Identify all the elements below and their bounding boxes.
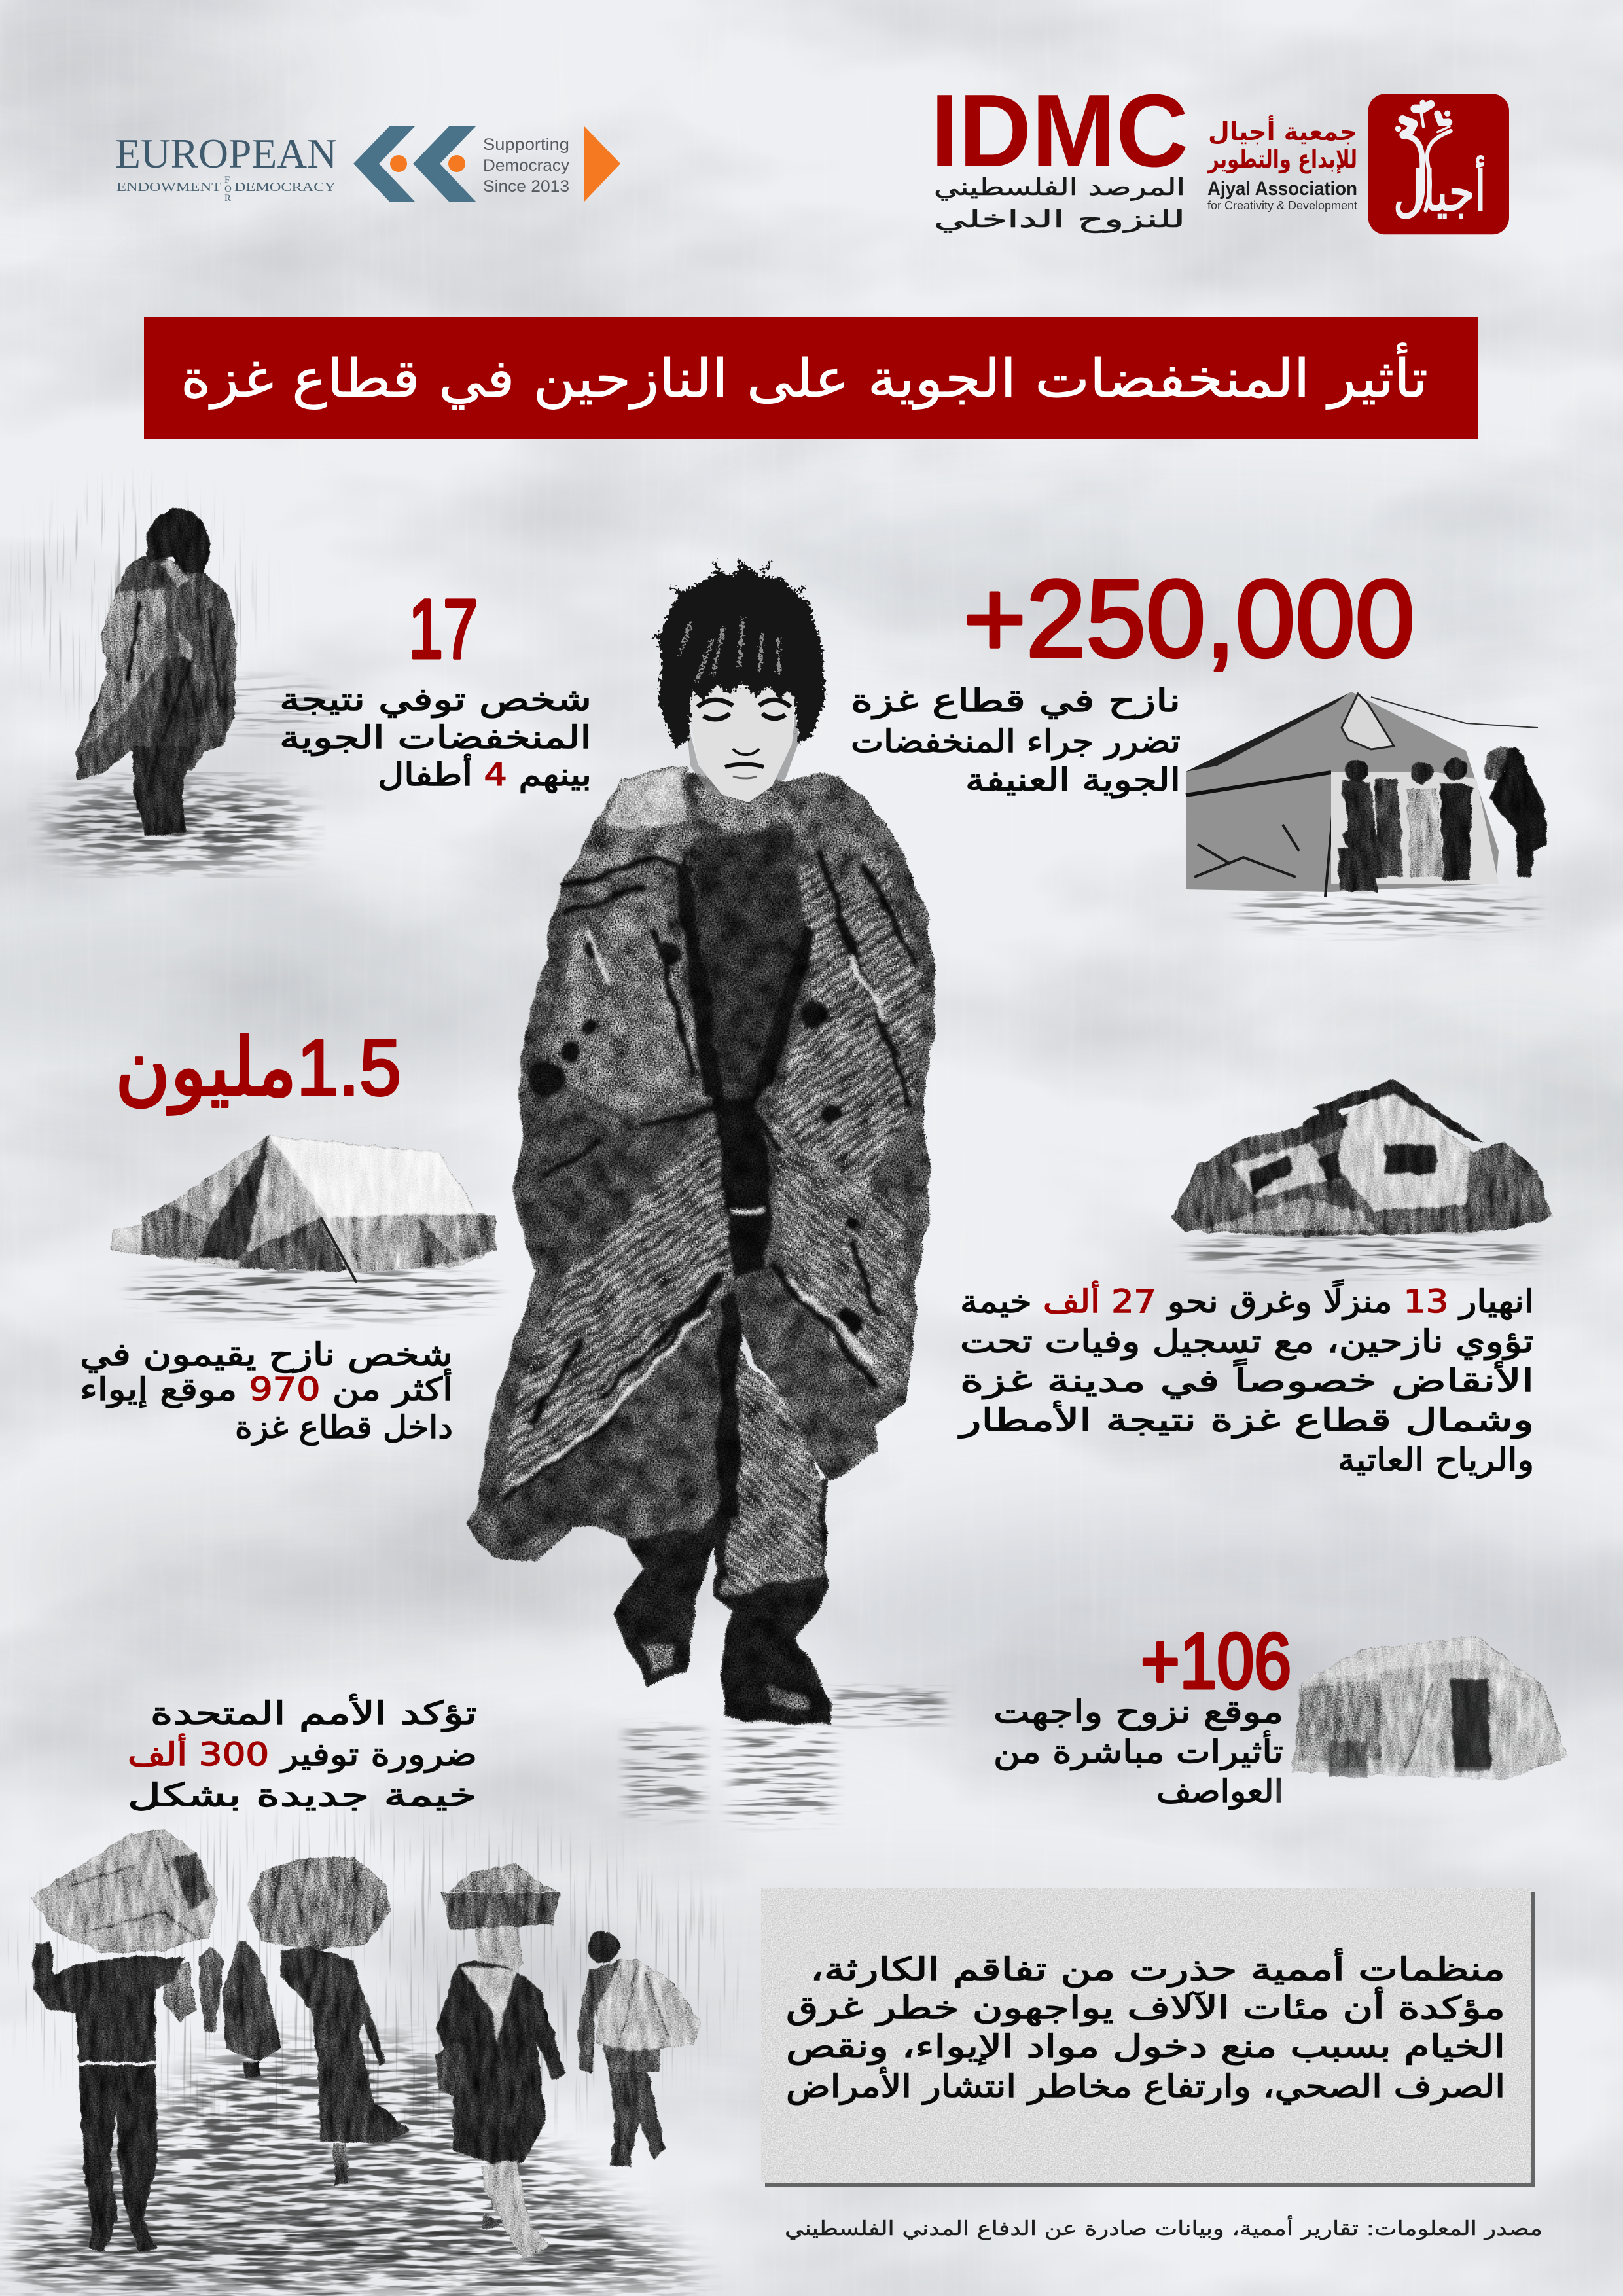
stat: 17 deaths: 17 [408,583,478,676]
illustration: collapsed house [1171,1079,1552,1272]
stat: 106 displacement sites: العواصف [1156,1773,1283,1810]
text: house collapse and tents flooded: الأنقاض خصوصاً في مدينة غزة [960,1358,1534,1399]
text: UN call for 300 thousand tents: تؤكد الأمم المتحدة [151,1693,477,1732]
reflection in water [628,1689,942,1820]
text: house collapse and tents flooded: تؤوي نازحين، مع تسجيل وفيات تحت [960,1323,1534,1360]
text: people in shelter sites [80,1336,453,1446]
logo: European Endowment for Democracy [115,130,337,204]
stat: 17 deaths: شخص توفي نتيجة [279,681,592,718]
stat: 250,000 displaced: نازح في قطاع غزة [851,683,1181,719]
logo: Ajyal emblem [1368,94,1509,234]
logo: European Endowment for Democracy: R [224,193,231,204]
text: UN call for 300 thousand tents: خيمة جديدة بشكل [128,1777,477,1814]
title banner [144,317,1478,439]
logo: Supporting Democracy chevrons: Democracy [483,156,570,175]
stat: 1.5 million: 1.5مليون [115,1023,401,1115]
panel: warning from UN organisations: مؤكدة أن مئات الآلاف يواجهون خطر غرق [786,1987,1505,2026]
text: UN call for 300 thousand tents [128,1693,477,1814]
logo: IDMC: للنزوح الداخلي [934,206,1185,233]
logo: Supporting Democracy chevrons: Supporting [483,135,569,154]
text: house collapse and tents flooded: وشمال قطاع غزة نتيجة الأمطار [958,1400,1534,1439]
logo: Supporting Democracy chevrons [353,126,620,202]
woman with round bundle [247,1856,391,1950]
boy's face details [698,700,791,778]
title banner: تأثير المنخفضات الجوية على النازحين في قطاع غزة [181,343,1428,410]
stat: 250,000 displaced [851,557,1415,798]
illustration: child walking in rain [26,497,334,865]
logo: Ajyal Association wordmark: for Creativity & Development [1207,199,1357,212]
logo: European Endowment for Democracy: F [224,175,230,185]
text: house collapse and tents flooded [958,1279,1534,1479]
stat: 17 deaths [279,583,592,793]
logo: Ajyal Association wordmark: Ajyal Association [1207,178,1357,200]
source note: مصدر المعلومات: تقارير أممية، وبيانات صادرة عن الدفاع المدني الفلسطيني [785,2215,1543,2240]
text: people in shelter sites: شخص نازح يقيمون في [80,1336,453,1373]
illustration: central boy in coat [467,560,942,1820]
logo: European Endowment for Democracy: DEMOCRACY [234,180,336,194]
distant figures [164,1964,196,2022]
woman with basket [441,1892,561,1930]
text: house collapse and tents flooded: انهيار 13 منزلًا وغرق نحو 27 ألف خيمة [960,1279,1534,1320]
logo: Ajyal Association wordmark [1207,115,1357,212]
stat: 250,000 displaced: تضرر جراء المنخفضات [851,723,1181,760]
logo: Ajyal Association wordmark: جمعية أجيال [1208,115,1357,146]
logo: European Endowment for Democracy: EUROPEAN [115,130,337,177]
man with back sack [588,1931,619,1963]
stat: 250,000 displaced: الجوية العنيفة [965,762,1181,798]
illustration: family in tent [1186,692,1548,931]
panel: warning from UN organisations: الصرف الصحي، وارتفاع مخاطر انتشار الأمراض [786,2066,1505,2105]
panel: warning from UN organisations: الخيام بسبب منع دخول مواد الإيواء، ونقص [786,2028,1505,2065]
illustration: displaced people walking in rain [0,1826,733,2296]
stat: 106 displacement sites: تأثيرات مباشرة من [993,1730,1283,1770]
panel: warning from UN organisations: منظمات أممية حذرت من تفاقم الكارثة، [810,1948,1505,1988]
logo: European Endowment for Democracy: O [224,184,232,194]
stat: 17 deaths: بينهم 4 أطفال [378,754,592,793]
logo: Ajyal emblem: أجيال [1393,156,1486,224]
illustration: flooded tent [111,1136,497,1318]
text: people in shelter sites: داخل قطاع غزة [235,1409,453,1446]
stat: 106 displacement sites [993,1617,1291,1810]
stat: 250,000 displaced: +250,000 [963,557,1415,680]
illustration: weathered tent [1276,1636,1590,1808]
text: house collapse and tents flooded: والرياح العاتية [1338,1442,1534,1479]
logo: IDMC: IDMC [931,73,1188,188]
text: UN call for 300 thousand tents: ضرورة توفير 300 ألف [128,1734,477,1773]
stat: 106 displacement sites: موقع نزوح واجهت [993,1694,1283,1731]
text: people in shelter sites: أكثر من 970 موقع إيواء [80,1369,453,1408]
logo: Supporting Democracy chevrons: Since 2013 [483,177,569,196]
man with sack [33,1941,184,2062]
panel: warning from UN organisations [761,1888,1535,2187]
logo: IDMC: المرصد الفلسطيني [934,174,1185,201]
logo: European Endowment for Democracy: ENDOWMENT [116,180,221,194]
boy's head [653,560,825,802]
stat: 106 displacement sites: +106 [1141,1617,1291,1705]
logo: Ajyal Association wordmark: للإبداع والتطوير [1207,145,1357,174]
stat: 17 deaths: المنخفضات الجوية [279,719,592,756]
